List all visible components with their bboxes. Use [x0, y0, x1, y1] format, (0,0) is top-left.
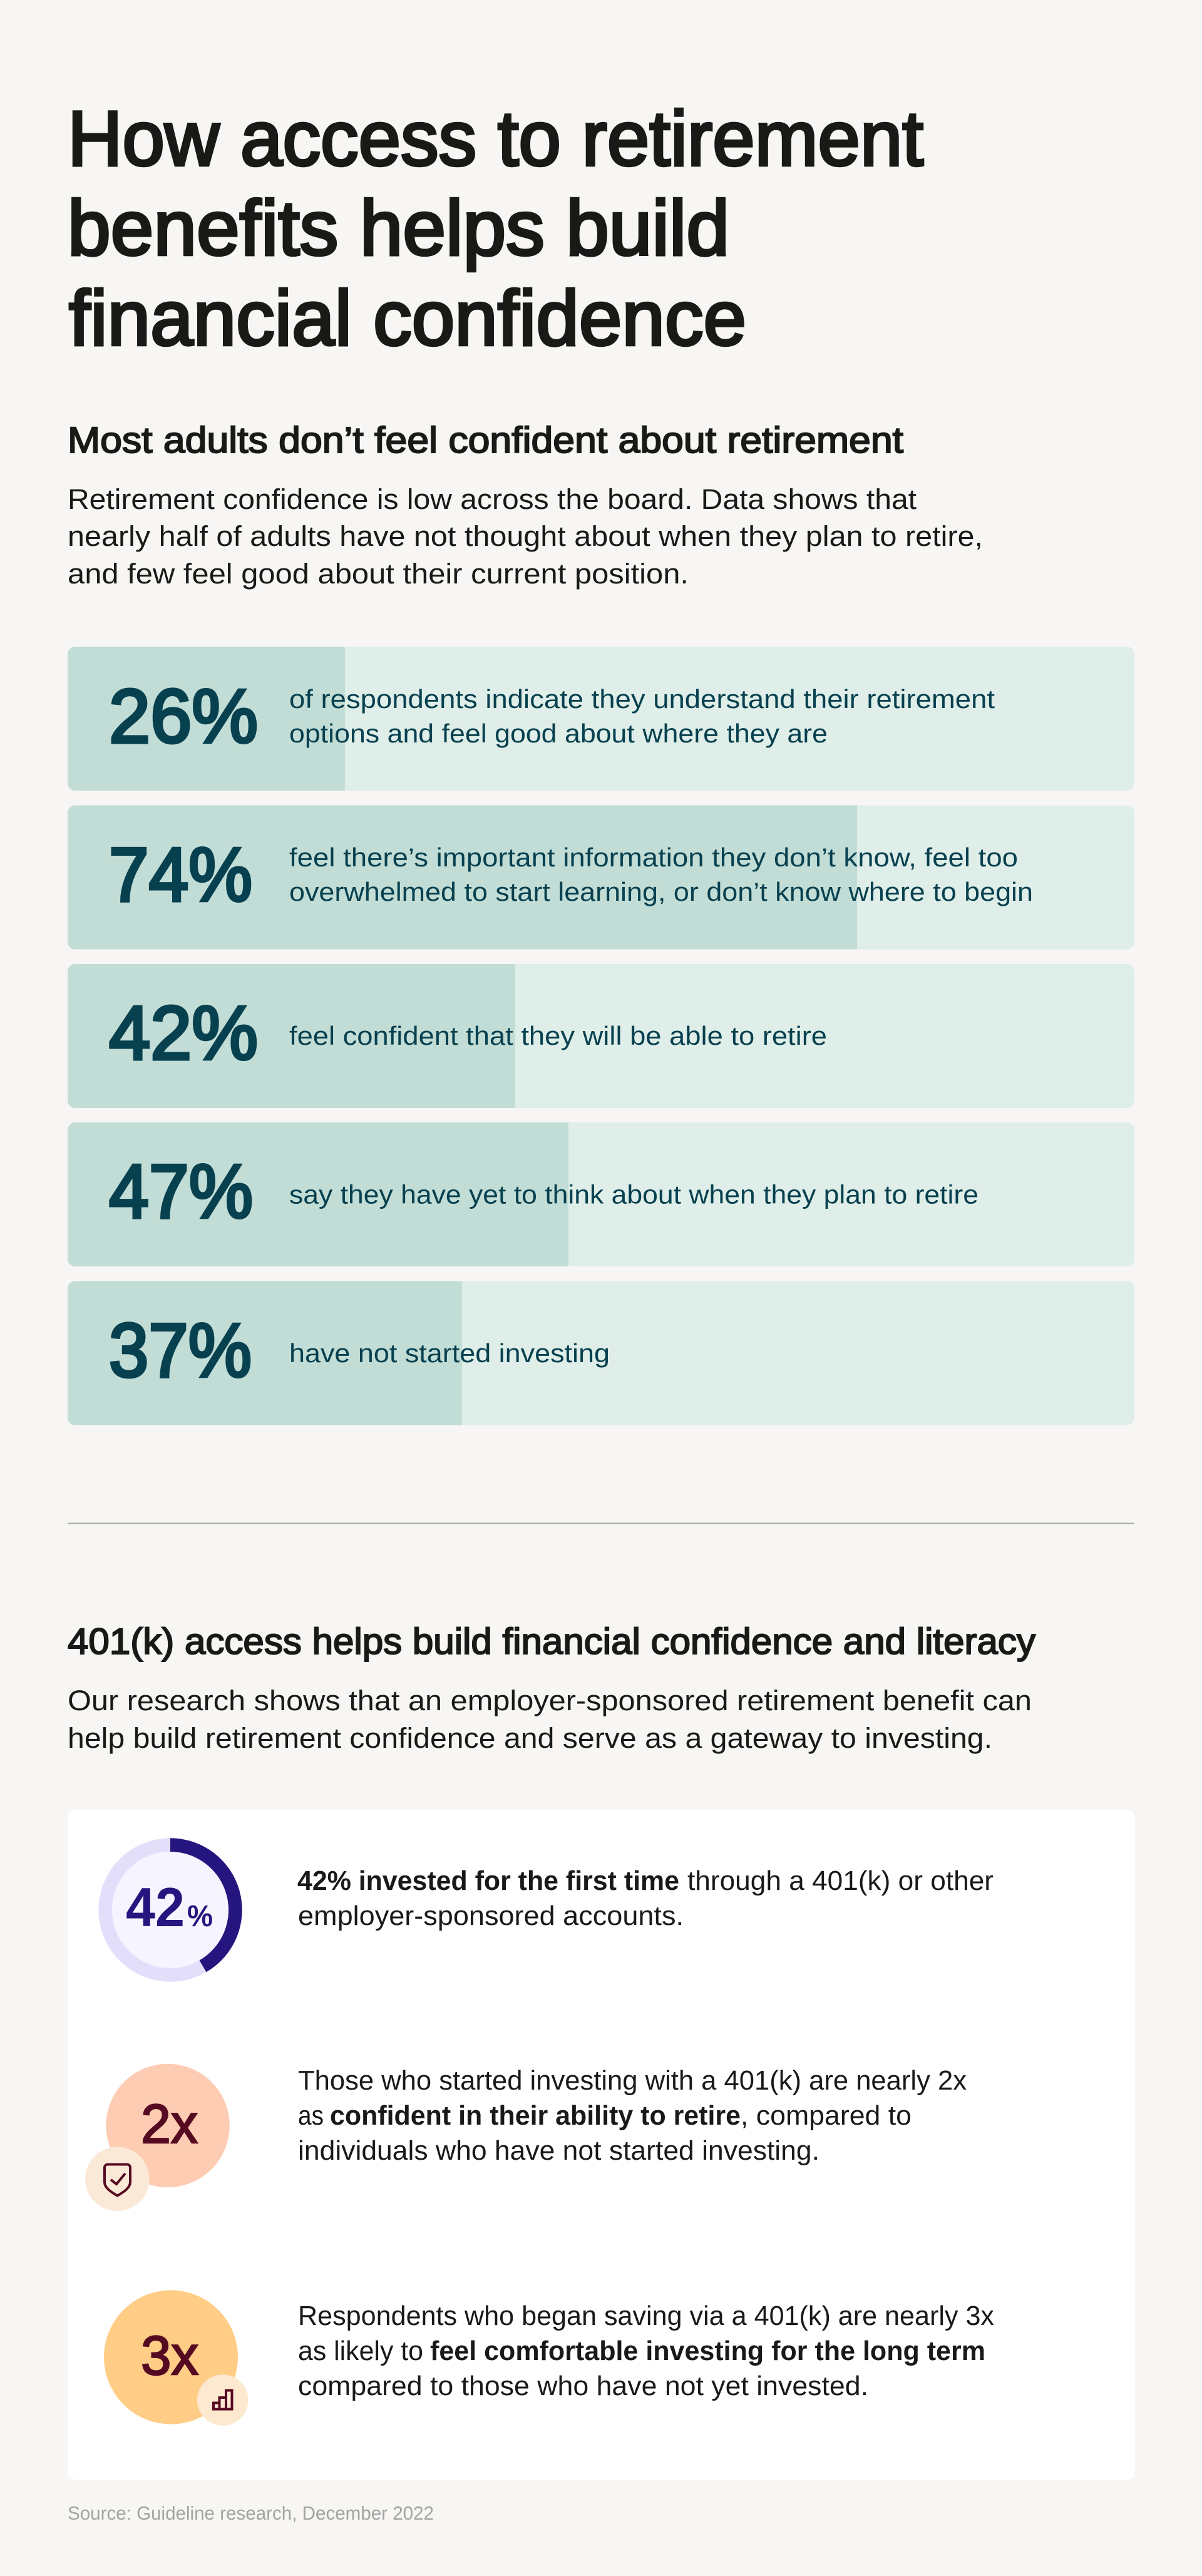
stat bar: 26%: of respondents indicate they understand their retirement — [289, 684, 995, 714]
stat bar: 37% — [68, 1281, 1134, 1425]
panel: 401(k) findings card — [68, 1810, 1134, 2480]
stat bar: 47% — [68, 1122, 1134, 1266]
intro text: retirement confidence — [68, 483, 983, 590]
stat bar: 26%: options and feel good about where they are — [289, 719, 828, 748]
text: 42% invested: employer-sponsored accounts. — [298, 1901, 684, 1931]
title: benefits helps build — [68, 185, 729, 272]
intro text: retirement confidence: and few feel good about their current position. — [68, 558, 689, 590]
stat bar: 26%: 26% — [109, 674, 258, 759]
intro text: our research — [68, 1685, 1032, 1754]
text: 42% invested: through a 401(k) or other — [687, 1865, 994, 1896]
icon: 2x circle with shield badge: 2x — [141, 2093, 198, 2155]
text: 42% invested — [297, 1865, 994, 1931]
intro text: retirement confidence: nearly half of adults have not thought about when they plan to retire, — [68, 520, 983, 552]
stat bar: 74%: 74% — [109, 832, 252, 917]
icon: 2x circle with shield badge — [85, 2064, 230, 2211]
text: 3x comfortable: compared to those who have not yet invested. — [298, 2371, 868, 2401]
title — [68, 96, 923, 362]
donut chart: 42% — [98, 1838, 242, 1982]
text: 2x confident: individuals who have not started investing. — [298, 2135, 819, 2166]
stat bar: 42% — [68, 964, 1134, 1108]
icon: 3x circle with chart badge: 3x — [141, 2324, 198, 2386]
text: 2x confident: confident in their ability to retire — [330, 2100, 741, 2131]
text: 3x comfortable: as likely to — [298, 2336, 423, 2366]
text: 3x comfortable — [298, 2301, 994, 2401]
donut chart: 42%: % — [187, 1900, 213, 1933]
donut chart: 42%: 42 — [126, 1876, 185, 1938]
section heading: most adults: Most adults don’t feel confident about retirement — [68, 420, 903, 461]
stat bar: 47%: 47% — [109, 1149, 253, 1234]
text: 3x comfortable: Respondents who began saving via a 401(k) are nearly 3x — [298, 2301, 994, 2331]
text: 3x comfortable: feel comfortable investing for the long term — [430, 2336, 985, 2366]
stat bar: 47%: say they have yet to think about when they plan to retire — [289, 1179, 979, 1209]
stat bar: 74% — [68, 805, 1134, 949]
intro text: our research: Our research shows that an employer-sponsored retirement benefit can — [68, 1685, 1032, 1716]
stat bar: 42%: 42% — [109, 990, 258, 1075]
text: 2x confident: Those who started investing with a 401(k) are nearly 2x — [298, 2065, 967, 2096]
text: 2x confident — [298, 2065, 967, 2166]
stat bar: 74%: feel there’s important information they don’t know, feel too — [289, 843, 1018, 872]
stat bar: 37%: 37% — [109, 1308, 252, 1393]
title: financial confidence — [69, 275, 746, 362]
source note: Source: Guideline research, December 2022 — [68, 2502, 434, 2524]
text: 2x confident: , compared to — [741, 2100, 912, 2131]
stat bar: 74%: overwhelmed to start learning, or don’t know where to begin — [289, 877, 1033, 906]
intro text: retirement confidence: Retirement confidence is low across the board. Data shows that — [68, 483, 917, 515]
title: How access to retirement — [68, 96, 923, 182]
stat bar: 37%: have not started investing — [289, 1338, 610, 1368]
section heading: 401(k) access: 401(k) access helps build financial confidence and literacy — [68, 1621, 1035, 1662]
panel: stat bars — [68, 647, 1134, 1425]
icon: 3x circle with chart badge — [104, 2290, 249, 2426]
stat bar: 26% — [68, 647, 1134, 791]
text: 42% invested: 42% invested for the first time — [297, 1865, 679, 1896]
stat bar: 42%: feel confident that they will be able to retire — [289, 1021, 827, 1050]
text: 2x confident: as — [298, 2100, 324, 2131]
intro text: our research: help build retirement confidence and serve as a gateway to investing. — [68, 1722, 992, 1754]
